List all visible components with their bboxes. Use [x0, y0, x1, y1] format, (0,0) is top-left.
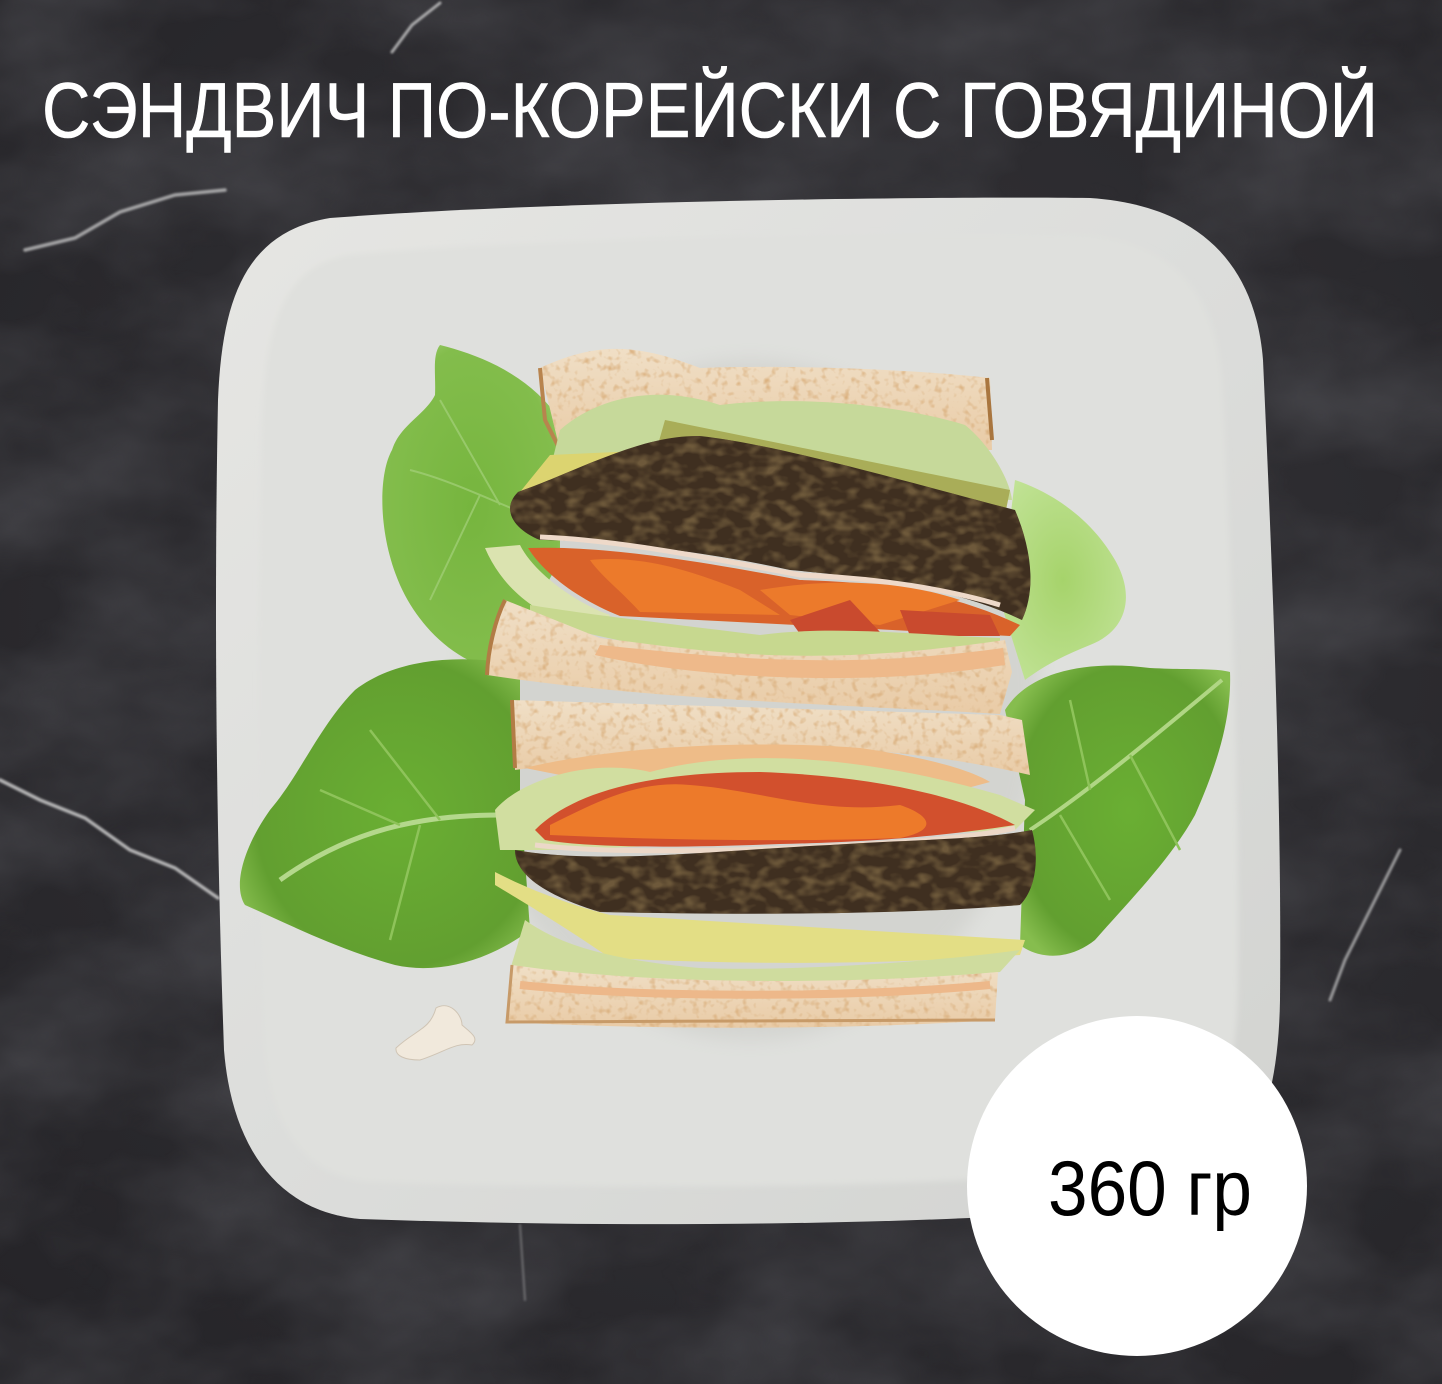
lettuce — [495, 758, 1035, 850]
bottom bread — [507, 965, 998, 1028]
ham stripe — [535, 828, 1015, 851]
beef layer — [510, 436, 1030, 620]
tomato and carrot — [535, 772, 1015, 847]
lettuce left frill — [485, 545, 610, 630]
sandwich shadow — [460, 360, 1040, 1040]
upper sandwich half — [485, 349, 1030, 714]
lower lettuce — [530, 605, 1000, 669]
weight badge: 360 гр — [1048, 1144, 1252, 1232]
leaf: upper left — [382, 345, 560, 670]
carrot and tomato — [528, 548, 1020, 636]
ham stripe — [540, 537, 1000, 605]
top bread — [512, 700, 1030, 775]
leaf: upper right pale — [1000, 480, 1126, 680]
weight badge — [967, 1016, 1307, 1356]
plate — [216, 198, 1280, 1224]
lower sandwich half — [495, 700, 1036, 1028]
lettuce layer top — [550, 395, 1012, 500]
top bread — [540, 349, 992, 450]
sauce smear — [396, 1006, 475, 1060]
lettuce lower — [510, 920, 1020, 982]
beef layer — [515, 830, 1036, 914]
lettuce leaves — [240, 345, 1230, 968]
leaf: lower left — [240, 659, 530, 968]
leaf: lower right — [1005, 665, 1230, 956]
bottom bread — [487, 600, 1012, 714]
cheese — [495, 872, 1025, 963]
